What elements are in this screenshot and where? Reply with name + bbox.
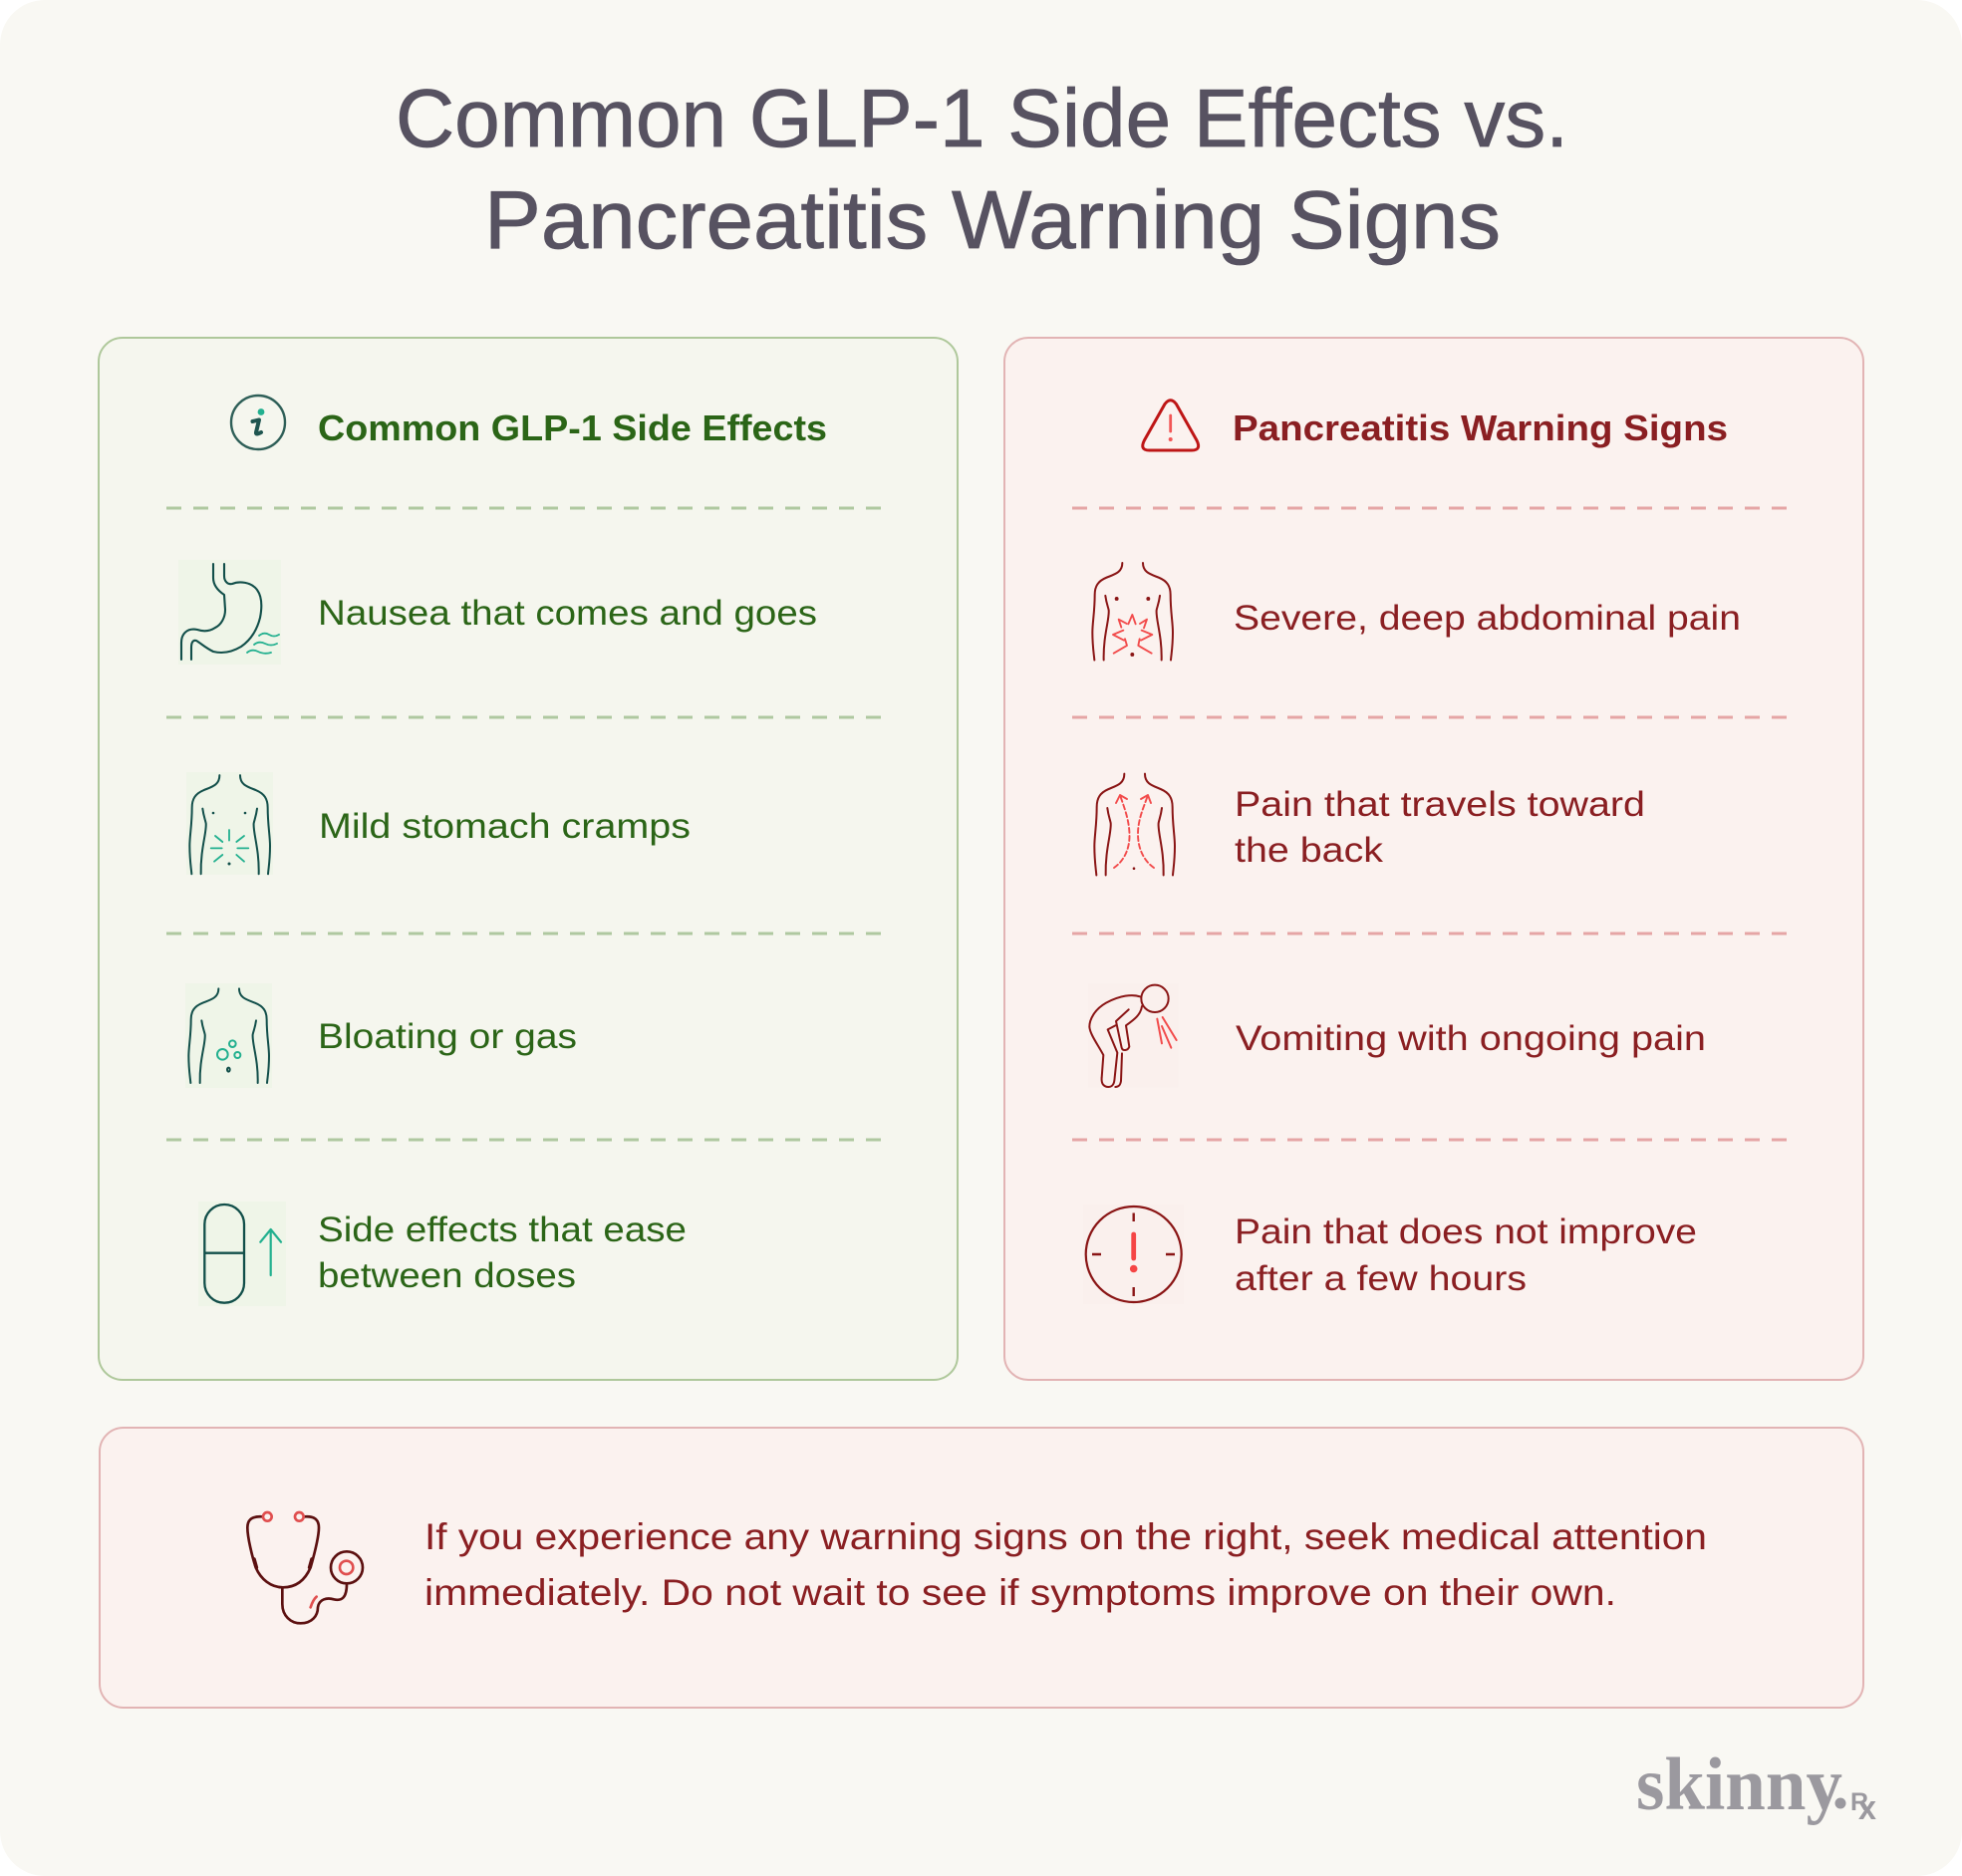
- label: ease between doses: [318, 1210, 687, 1295]
- label: no improvement: [1235, 1212, 1697, 1298]
- row: pain travels to back: [1094, 774, 1645, 875]
- icon: stethoscope: [247, 1512, 363, 1623]
- title: [396, 72, 1568, 266]
- callout text: [424, 1516, 1707, 1613]
- callout text: immediately. Do not wait to see if symptoms improve on their own.: [424, 1572, 1616, 1613]
- label: bloating: Bloating or gas: [318, 1017, 577, 1056]
- heading: common side effects: Common GLP-1 Side Effects: [318, 407, 827, 448]
- panel: common side effects: [99, 338, 958, 1380]
- title: Pancreatitis Warning Signs: [484, 173, 1501, 266]
- label: no improvement: Pain that does not improve: [1235, 1212, 1697, 1251]
- label: ease between doses: between doses: [318, 1256, 576, 1295]
- row: ease between doses: [198, 1202, 687, 1306]
- icon: torso with cramps: [186, 772, 273, 875]
- label: pain travels to back: the back: [1235, 831, 1384, 870]
- icon: torso with pain burst: [1092, 563, 1173, 660]
- panel: call to action: [100, 1428, 1863, 1708]
- logo: skinny Rx: skinny: [1636, 1743, 1842, 1826]
- row: cramps: [186, 772, 691, 875]
- logo: skinny Rx: R: [1850, 1788, 1868, 1816]
- logo: skinny Rx: x: [1858, 1789, 1876, 1827]
- icon: warning triangle: [1143, 401, 1199, 450]
- row: vomiting: [1088, 983, 1706, 1088]
- row: no improvement: [1083, 1205, 1697, 1304]
- icon: clock with exclamation: [1083, 1205, 1184, 1304]
- callout text: If you experience any warning signs on the right, seek medical attention: [424, 1516, 1707, 1557]
- icon: torso with dashed arrows: [1094, 774, 1175, 875]
- row: bloating: [185, 983, 577, 1088]
- heading: warning signs: Pancreatitis Warning Signs: [1233, 407, 1728, 448]
- label: pain travels to back: Pain that travels toward: [1235, 785, 1645, 824]
- label: pain travels to back: [1235, 785, 1645, 870]
- icon: capsule with arrow: [198, 1202, 286, 1306]
- row: nausea: [178, 560, 817, 665]
- label: severe pain: Severe, deep abdominal pain: [1234, 599, 1741, 638]
- icon: person bending and vomiting: [1088, 983, 1179, 1088]
- icon: torso with bubbles: [185, 983, 272, 1088]
- label: nausea: Nausea that comes and goes: [318, 594, 817, 633]
- label: vomiting: Vomiting with ongoing pain: [1236, 1019, 1706, 1058]
- label: ease between doses: Side effects that ease: [318, 1210, 687, 1249]
- icon: stomach with waves: [178, 560, 281, 665]
- label: no improvement: after a few hours: [1235, 1259, 1527, 1298]
- row: severe pain: [1092, 563, 1741, 660]
- panel: pancreatitis warning signs: [1004, 338, 1863, 1380]
- label: cramps: Mild stomach cramps: [319, 807, 691, 846]
- title: Common GLP-1 Side Effects vs.: [396, 72, 1568, 164]
- icon: info: [231, 396, 285, 449]
